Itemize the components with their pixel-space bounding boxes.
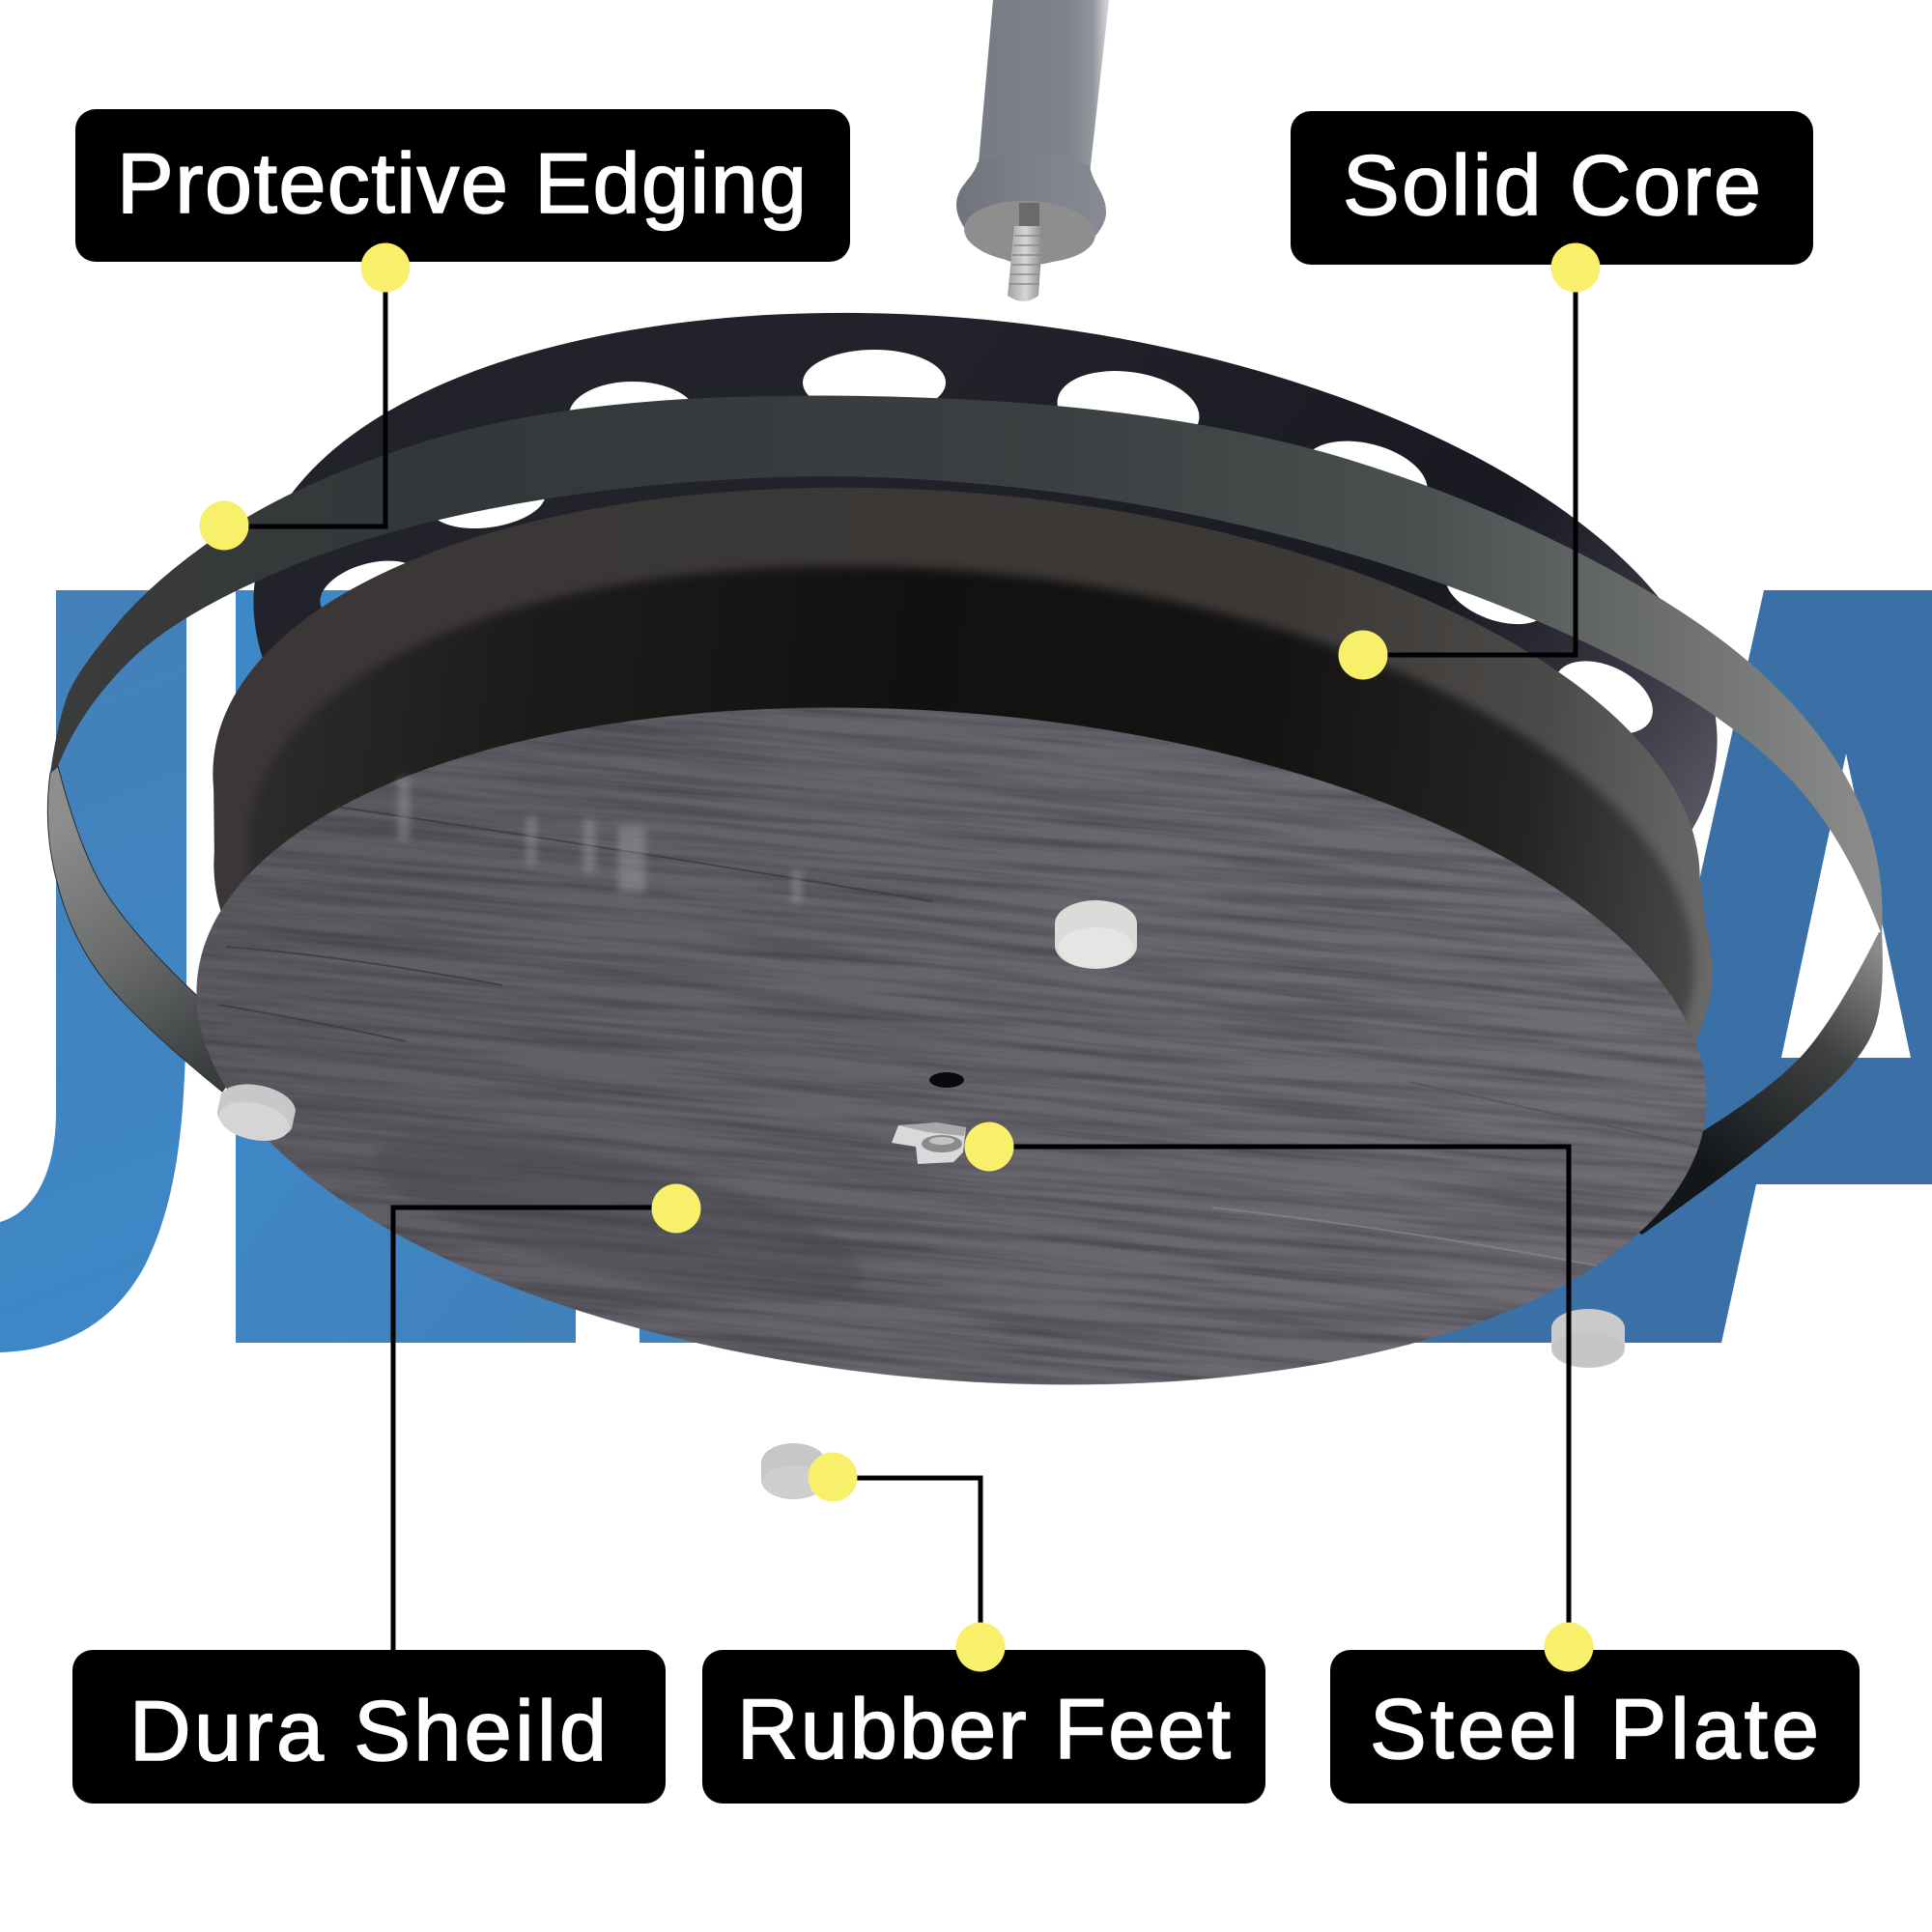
label: Solid Core [1291, 111, 1813, 265]
rubber foot at lower right of disk [1551, 1309, 1625, 1368]
background lettering: blue block letters [0, 590, 1932, 1352]
yellow marker dots [199, 243, 1600, 1671]
label: Protective Edging [75, 109, 850, 262]
worn highlights on disk [398, 778, 802, 903]
label: Steel Plate [1330, 1650, 1860, 1804]
rubber foot on disk centre right [1055, 900, 1137, 969]
label: Rubber Feet: Rubber Feet [737, 1681, 1231, 1776]
label: Rubber Feet [702, 1650, 1265, 1804]
wood grain streaks [217, 807, 1698, 1265]
steel t-nut [892, 1122, 966, 1164]
label: Dura Sheild [72, 1650, 666, 1804]
label: Solid Core: Solid Core [1343, 137, 1761, 233]
label: Steel Plate: Steel Plate [1370, 1681, 1819, 1776]
detached rubber foot [761, 1443, 826, 1499]
solid core [185, 429, 1741, 1315]
threaded leg post [956, 0, 1109, 301]
rubber foot on disk left edge [213, 1078, 299, 1148]
label: Dura Sheild: Dura Sheild [129, 1683, 607, 1778]
protective edging ring [47, 396, 1883, 1235]
centre hole [929, 1072, 964, 1088]
dura shield wood disk [168, 648, 1735, 1444]
connector lines [224, 268, 1576, 1650]
mottled area lower left of disk [360, 1100, 876, 1334]
perforated back plate [253, 313, 1718, 830]
label: Protective Edging: Protective Edging [117, 135, 807, 231]
